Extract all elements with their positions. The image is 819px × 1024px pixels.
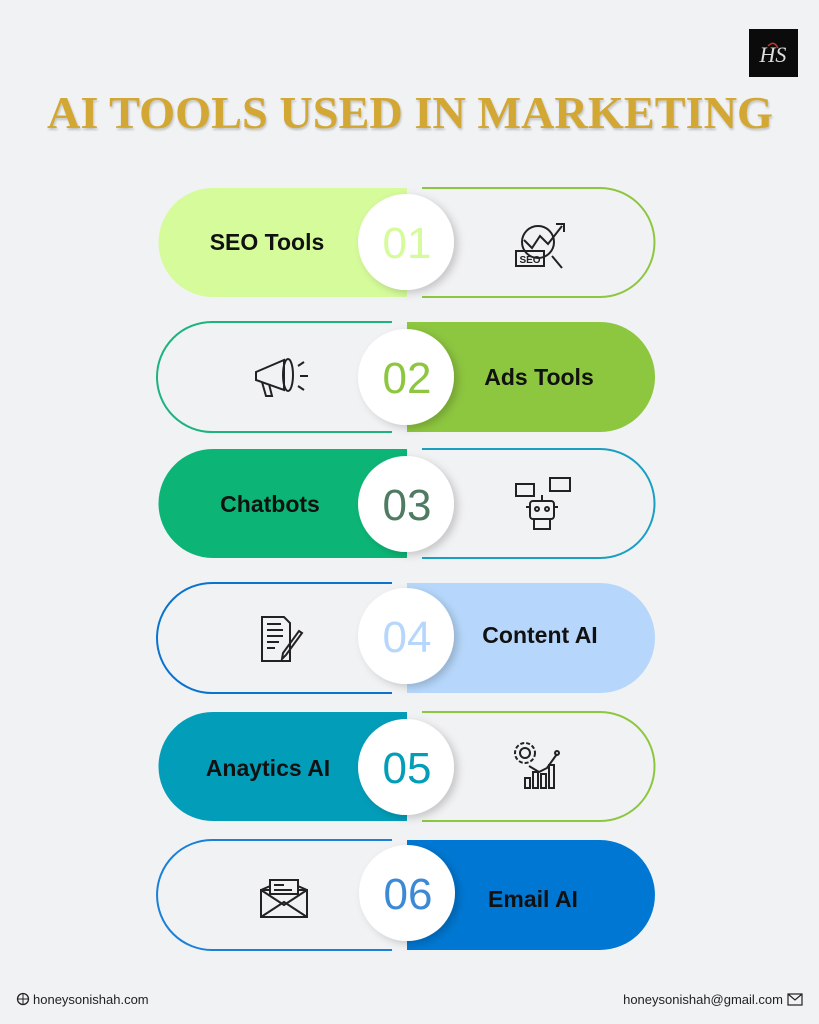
row 2: Ads Tools: 02	[383, 354, 431, 403]
row 2: Ads Tools: Ads Tools	[484, 364, 594, 390]
logo: HS	[759, 42, 786, 67]
footer: email: honeysonishah@gmail.com	[623, 992, 783, 1007]
row 3: Chatbots	[158, 449, 654, 558]
row 2: Ads Tools	[157, 322, 655, 432]
row 4: Content AI: 04	[383, 613, 431, 662]
row 4: Content AI: Content AI	[482, 622, 598, 648]
row 5: Anaytics AI	[158, 712, 654, 821]
row 5: Anaytics AI: Anaytics AI	[206, 755, 330, 781]
icon: analytics	[515, 743, 559, 788]
logo	[749, 29, 798, 77]
icon: megaphone	[256, 359, 308, 396]
icon: seo	[516, 224, 564, 268]
row 6: Email AI: 06	[384, 870, 432, 919]
footer: website: honeysonishah.com	[33, 992, 149, 1007]
row 5: Anaytics AI: 05	[383, 744, 431, 793]
row 4: Content AI	[157, 583, 655, 693]
icon: robot	[516, 478, 570, 529]
row 1: SEO Tools: 01	[383, 219, 431, 268]
row 1: SEO Tools: SEO Tools	[210, 229, 324, 255]
row 3: Chatbots: 03	[383, 481, 431, 530]
icon: document	[262, 617, 302, 661]
title: AI TOOLS USED IN MARKETING	[47, 87, 773, 138]
icon: envelope	[261, 880, 307, 917]
row 3: Chatbots: Chatbots	[220, 491, 320, 517]
row 1: SEO Tools	[158, 188, 654, 297]
row 6: Email AI: Email AI	[488, 886, 578, 912]
row 6: Email AI	[157, 840, 655, 950]
row 1: SEO Tools: SEO	[519, 255, 541, 266]
